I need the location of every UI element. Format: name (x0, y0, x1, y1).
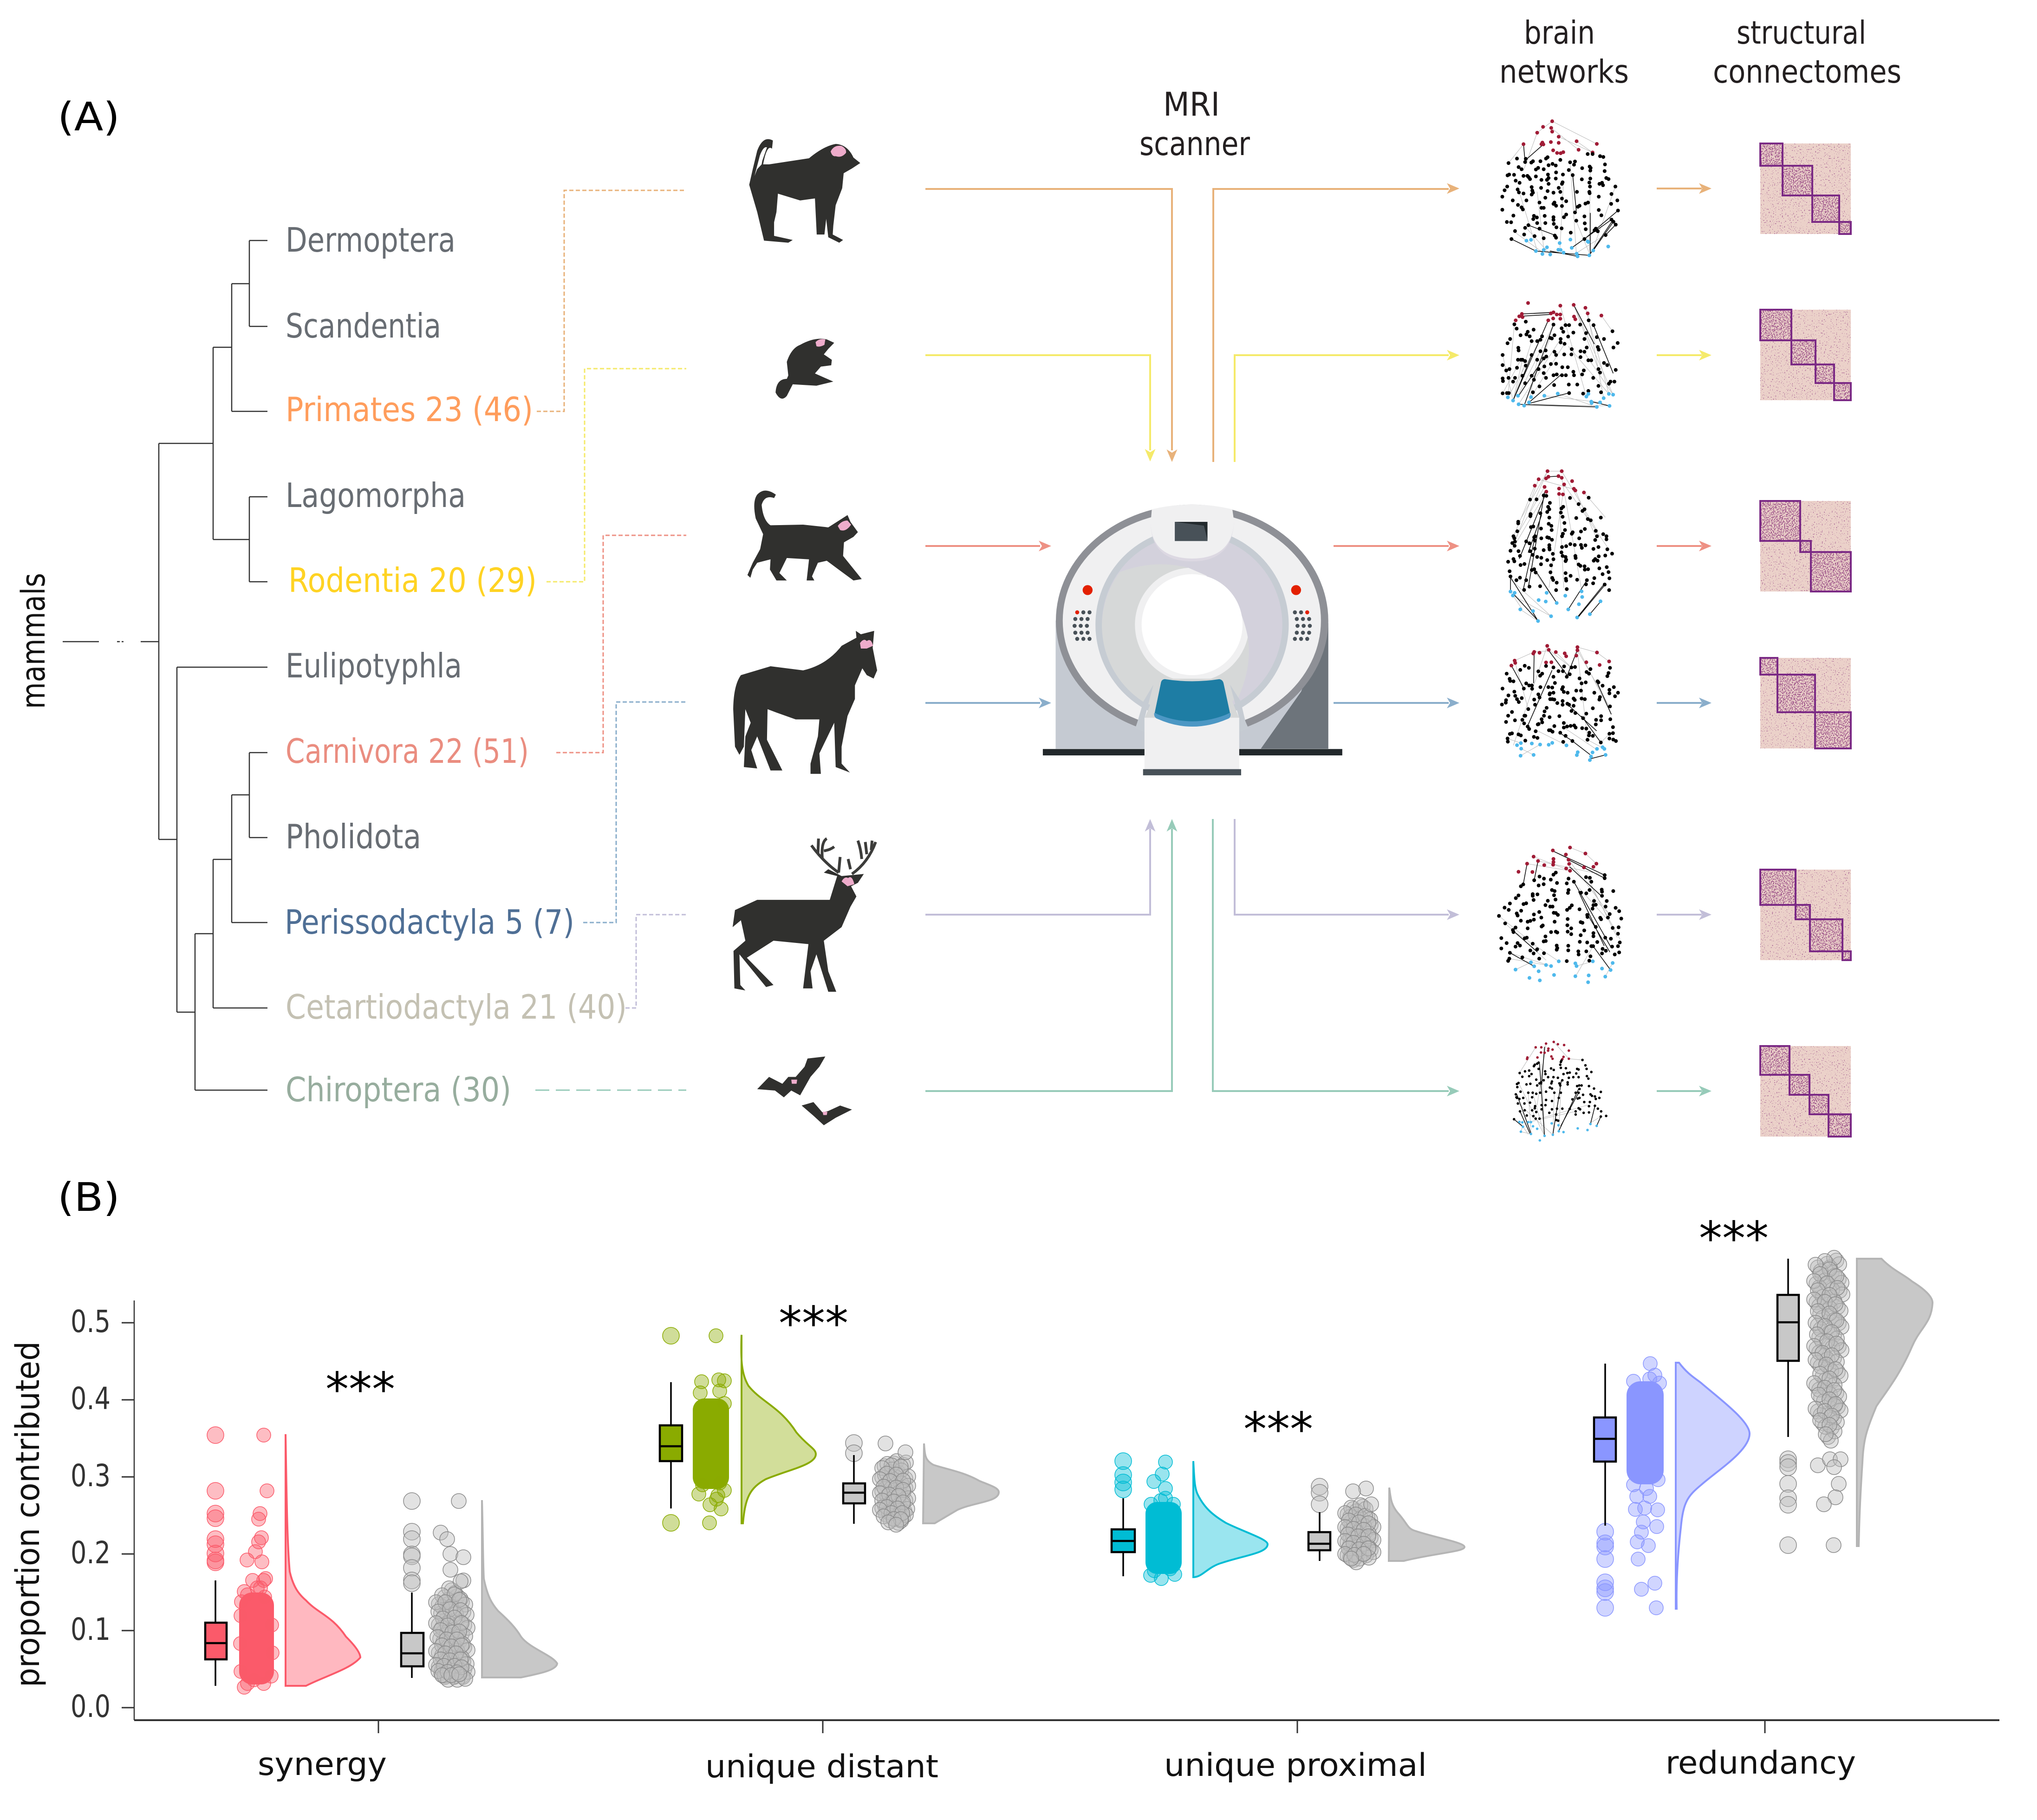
structural connectomes heading: structural (1737, 14, 1866, 52)
significance stars: *** (325, 1362, 395, 1417)
raincloud: unique distant, null data (843, 1435, 999, 1532)
significance stars (325, 1211, 1769, 1456)
x axis category labels: synergy (258, 1746, 387, 1783)
panel label B: (B) (58, 1175, 120, 1221)
label: Rodentia: Rodentia 20 (29) (288, 561, 537, 600)
brain network: rodent (1503, 303, 1618, 407)
brain network: primate (1502, 121, 1618, 256)
y axis tick labels: 0.2 (71, 1535, 111, 1571)
tree axis label: mammals: mammals (14, 573, 52, 709)
flow arrows: animals to scanner to networks (925, 183, 1712, 1097)
raincloud: redundancy, real data (1594, 1357, 1750, 1616)
significance stars: *** (779, 1296, 848, 1351)
raincloud: synergy, real data (205, 1427, 360, 1694)
icon: horse (733, 631, 877, 774)
brain networks heading: networks (1499, 53, 1629, 91)
raincloud: redundancy, null data (1777, 1250, 1933, 1554)
arrow: bat flow (925, 819, 1712, 1097)
brain network: cetartiodactyl (1499, 847, 1621, 982)
y axis title: proportion contributed (9, 1341, 47, 1687)
arrow: perissodactyl flow (925, 697, 1712, 708)
panel label A: (A) (58, 94, 120, 140)
y axis tick labels (71, 1304, 111, 1724)
brain networks heading: brain (1524, 14, 1595, 52)
x axis category labels (258, 1745, 1856, 1785)
x axis category labels: redundancy (1666, 1745, 1856, 1781)
brain network: bat (1514, 1042, 1606, 1140)
raincloud: unique distant, real data (660, 1327, 816, 1531)
raincloud: unique proximal, real data (1112, 1453, 1268, 1586)
y axis tick labels: 0.1 (71, 1612, 111, 1647)
structural connectomes heading (1713, 14, 1901, 91)
structural connectome: perissodactyl (1760, 658, 1851, 748)
structural connectome: primate (1760, 143, 1851, 234)
significance stars: *** (1699, 1211, 1769, 1266)
y axis tick labels: 0.3 (71, 1458, 111, 1494)
raincloud: synergy, null data (401, 1493, 557, 1687)
label: Scandentia: Scandentia (286, 306, 441, 345)
MRI scanner heading (1139, 85, 1250, 163)
brain network: perissodactyl (1502, 646, 1618, 760)
brain network: carnivore (1508, 471, 1612, 621)
label: Dermoptera: Dermoptera (286, 221, 456, 260)
structural connectome: bat (1760, 1046, 1851, 1137)
icon: rodent (775, 339, 834, 399)
icon: deer (733, 838, 876, 992)
raincloud chart axes (122, 1300, 1999, 1733)
arrow: cetartiodactyl flow (925, 819, 1712, 920)
icon: primate (749, 139, 860, 243)
label: Primates: Primates 23 (46) (286, 390, 533, 429)
order labels (285, 221, 627, 1109)
label: Cetartiodactyla: Cetartiodactyla 21 (40) (286, 988, 627, 1027)
icon: MRI scanner (1043, 505, 1342, 775)
x axis category labels: unique proximal (1164, 1747, 1427, 1784)
MRI scanner heading: MRI (1163, 85, 1220, 124)
raincloud: unique proximal, null data (1308, 1478, 1464, 1570)
y axis tick labels: 0.0 (71, 1689, 111, 1724)
arrow: rodent flow (925, 350, 1712, 462)
label: Eulipotyphla: Eulipotyphla (286, 646, 462, 685)
brain networks heading (1499, 14, 1629, 91)
label: Pholidota: Pholidota (286, 817, 421, 856)
structural connectome: carnivore (1760, 501, 1851, 592)
structural connectome: rodent (1760, 310, 1851, 400)
significance stars: *** (1243, 1402, 1313, 1456)
y axis tick labels: 0.4 (71, 1381, 111, 1417)
MRI scanner heading: scanner (1139, 125, 1250, 163)
arrow: primate flow (925, 183, 1712, 462)
arrow: carnivore flow (925, 540, 1712, 552)
icon: cat (748, 491, 862, 580)
label: Chiroptera: Chiroptera (30) (286, 1070, 511, 1109)
animal silhouettes (733, 139, 877, 1125)
structural connectome: cetartiodactyl (1760, 870, 1851, 960)
label: Perissodactyla: Perissodactyla 5 (7) (285, 903, 574, 942)
label: Carnivora: Carnivora 22 (51) (286, 732, 529, 771)
y axis tick labels: 0.5 (71, 1304, 111, 1339)
x axis category labels: unique distant (705, 1748, 938, 1785)
structural connectomes heading: connectomes (1713, 53, 1901, 91)
icon: bats (757, 1057, 852, 1125)
dashed connectors (535, 190, 686, 1090)
label: Lagomorpha: Lagomorpha (286, 476, 466, 515)
phylogenetic tree (63, 240, 267, 1090)
